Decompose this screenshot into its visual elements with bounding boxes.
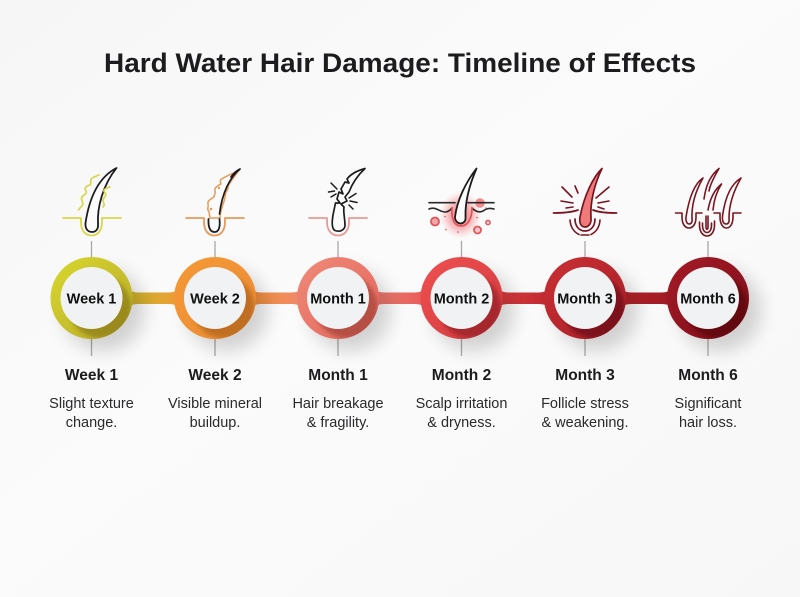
description: Follicle stress bbox=[541, 396, 629, 412]
connector line bbox=[90, 241, 92, 356]
stage 5: month 3 bbox=[541, 168, 638, 431]
label: Week 1 bbox=[65, 367, 118, 384]
node: Week 2 bbox=[190, 292, 240, 308]
description: Significant bbox=[675, 396, 741, 412]
stage 4: month 2 bbox=[416, 168, 514, 431]
label: Month 2 bbox=[432, 367, 491, 384]
stage 2: week 2 bbox=[168, 169, 268, 431]
label: Month 1 bbox=[308, 367, 368, 384]
node bbox=[544, 257, 638, 351]
description: Slight texture bbox=[49, 396, 134, 412]
timeline connectors bbox=[128, 289, 672, 307]
description: Scalp irritation bbox=[416, 396, 507, 412]
node bbox=[667, 257, 761, 351]
description: hair loss. bbox=[679, 415, 737, 431]
description: & weakening. bbox=[541, 415, 629, 431]
icon: hair with slight texture change bbox=[63, 168, 121, 236]
node: Week 1 bbox=[67, 292, 116, 308]
connector line bbox=[337, 241, 339, 356]
description: change. bbox=[66, 415, 117, 431]
node: Month 3 bbox=[557, 292, 613, 308]
node bbox=[297, 257, 391, 351]
connector line bbox=[460, 241, 462, 356]
description: buildup. bbox=[190, 415, 240, 431]
icon: irritated scalp bbox=[429, 168, 494, 239]
description: & fragility. bbox=[307, 415, 369, 431]
stage 3: month 1 bbox=[292, 168, 391, 431]
connector line bbox=[707, 241, 709, 356]
icon: broken fragile hair bbox=[309, 168, 367, 236]
connector line bbox=[584, 241, 586, 356]
node: Month 2 bbox=[434, 292, 489, 308]
label: Month 6 bbox=[678, 367, 738, 384]
node bbox=[420, 257, 514, 351]
icon: stressed follicle bbox=[554, 168, 616, 235]
label: Month 3 bbox=[555, 367, 615, 384]
icon: hair with mineral buildup bbox=[186, 169, 244, 236]
title: Hard Water Hair Damage: Timeline of Effects bbox=[104, 48, 696, 78]
node: Month 6 bbox=[680, 292, 736, 308]
description: & dryness. bbox=[427, 415, 496, 431]
description: Visible mineral bbox=[168, 396, 262, 412]
label: Week 2 bbox=[188, 367, 242, 384]
node bbox=[50, 257, 144, 351]
node: Month 1 bbox=[310, 292, 366, 308]
description: Hair breakage bbox=[292, 396, 384, 412]
stage 1: week 1 bbox=[49, 168, 144, 431]
node bbox=[174, 257, 268, 351]
stage 6: month 6 bbox=[667, 168, 761, 431]
icon: multiple hairs with hair loss bbox=[676, 168, 741, 236]
connector line bbox=[214, 241, 216, 356]
